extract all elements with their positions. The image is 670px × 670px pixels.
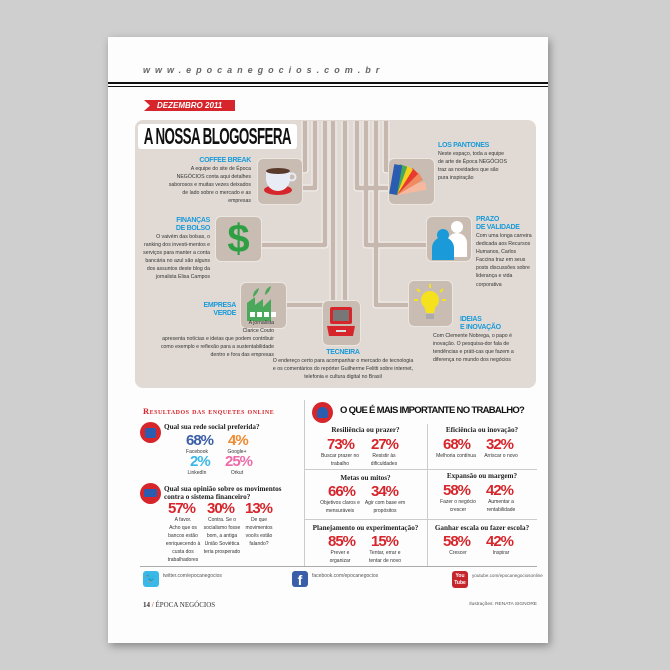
page bbox=[108, 37, 548, 643]
text: 85% bbox=[328, 533, 355, 550]
text: 🐦 bbox=[145, 573, 157, 584]
text: 13% bbox=[245, 500, 272, 517]
social: facebook bbox=[292, 571, 378, 588]
text: 58% bbox=[443, 482, 470, 499]
text: 73% bbox=[327, 436, 354, 453]
text: financas: FINANÇAS bbox=[176, 217, 210, 224]
text: Metas ou mitos? bbox=[340, 474, 391, 482]
text: los pantones: Neste espaço, toda a equipe de arte de Época NEGÓCIOS traz as novidades que são pura inspiração bbox=[438, 151, 507, 181]
text: Ilustrações: RENATA SIGNORE bbox=[469, 602, 537, 607]
text: Ganhar escala ou fazer escola? bbox=[435, 524, 529, 532]
text: 42% bbox=[486, 533, 513, 550]
grid cells bbox=[321, 426, 400, 467]
heading: resultados: Resultados das enquetes online bbox=[143, 406, 274, 416]
date ribbon: DEZEMBRO 2011 bbox=[157, 101, 222, 110]
text: apresenta notícias e ideias que podem contribuir como exemplo e reflexão para a sustentabilidade dentro e fora das empresas bbox=[161, 336, 274, 358]
social: twitter bbox=[143, 571, 222, 587]
icon: pantone bbox=[388, 158, 435, 205]
icon: thumb bbox=[140, 422, 161, 443]
text: Melhoria contínua bbox=[436, 453, 476, 459]
text: 27% bbox=[371, 436, 398, 453]
text: You bbox=[455, 573, 465, 579]
text: empresa verde: EMPRESA bbox=[203, 302, 236, 309]
text: 2% bbox=[190, 453, 210, 470]
text: Contra. Se o socialismo fosse bom, a antiga União Soviética teria prosperado bbox=[204, 517, 240, 555]
icon: coffee bbox=[257, 158, 303, 205]
text: Facebook bbox=[186, 449, 208, 455]
text: A favor. bbox=[175, 517, 191, 523]
text: Eficiência ou inovação? bbox=[446, 426, 518, 434]
social: youtube bbox=[452, 571, 543, 588]
text: 68% bbox=[443, 436, 470, 453]
icon: people bbox=[426, 216, 472, 262]
text: Tentar, errar e tentar de novo bbox=[369, 550, 401, 564]
icon: dollar: $ bbox=[227, 217, 250, 261]
text: Planejamento ou experimentação? bbox=[313, 524, 418, 532]
text: prazo de validade: PRAZO bbox=[476, 216, 499, 223]
text: Prever e organizar bbox=[330, 550, 350, 564]
poll: social bbox=[164, 423, 260, 476]
poll: movimentos: Qual sua opinião sobre os movimentos bbox=[164, 485, 281, 493]
text: f bbox=[298, 572, 302, 588]
text: Tube bbox=[454, 580, 466, 586]
icon: worker bbox=[312, 402, 333, 423]
text: A jornalista bbox=[249, 320, 274, 326]
grid cells: Resiliência ou prazer? bbox=[331, 426, 400, 434]
text: ideias e inovacao: E INOVAÇÃO bbox=[460, 324, 501, 331]
text: Acho que os bancos estão enriquecendo à custa dos trabalhadores bbox=[166, 525, 200, 563]
icon: laptop bbox=[322, 300, 361, 346]
text: empresa verde: VERDE bbox=[213, 310, 236, 317]
poll: movimentos: contra o sistema financeiro? bbox=[164, 493, 250, 501]
icon: card bbox=[140, 483, 161, 504]
text: Expansão ou margem? bbox=[447, 472, 517, 480]
text: Crescer bbox=[449, 550, 467, 556]
text: 25% bbox=[225, 453, 252, 470]
text: Objetivos claros e mensuráveis bbox=[320, 500, 360, 514]
text: tecneira: O endereço certo para acompanhar o mercado de tecnologia e os comentários do repórter Guilherme Felitti sobre internet, telefonia e cultura digital no Brasil bbox=[273, 358, 413, 380]
text: financas: DE BOLSO bbox=[176, 225, 210, 232]
icon: dollar bbox=[215, 216, 262, 262]
text: ideias e inovacao: IDEIAS bbox=[460, 316, 482, 323]
text: Clarice Couto bbox=[243, 328, 274, 334]
text: financas: O vaivém das bolsas, o ranking dos investi-mentos e serviços para manter a conta bancária no azul são alguns dos assuntos deste blog da jornalista Elisa Campos bbox=[143, 234, 210, 280]
text: facebook.com/epocanegocios bbox=[312, 573, 378, 579]
text: Aumentar a rentabilidade bbox=[487, 499, 515, 513]
text: 15% bbox=[371, 533, 398, 550]
text: De que movimentos vocês estão falando? bbox=[246, 517, 272, 547]
text: 68% bbox=[186, 432, 213, 449]
panel: blogosfera bbox=[135, 120, 536, 388]
heading: trabalho: O QUE É MAIS IMPORTANTE NO TRABALHO? bbox=[340, 405, 524, 416]
text: 58% bbox=[443, 533, 470, 550]
text: twitter.com/epocanegocios bbox=[163, 573, 222, 579]
text: 34% bbox=[371, 483, 398, 500]
icon: factory bbox=[240, 282, 287, 329]
footer: 14 / ÉPOCA NEGÓCIOS bbox=[143, 601, 215, 609]
date ribbon bbox=[144, 100, 235, 111]
text: 4% bbox=[228, 432, 248, 449]
text: 66% bbox=[328, 483, 355, 500]
text: Inspirar bbox=[493, 550, 509, 556]
text: los pantones: LOS PANTONES bbox=[438, 142, 489, 149]
poll: social: Qual sua rede social preferida? bbox=[164, 423, 260, 431]
text: 57% bbox=[168, 500, 195, 517]
text: Fazer o negócio crescer bbox=[440, 499, 476, 513]
text: 32% bbox=[486, 436, 513, 453]
text: 42% bbox=[486, 482, 513, 499]
text: tecneira: TECNEIRA bbox=[326, 349, 360, 356]
text: youtube.com/epocanegociosonline bbox=[472, 573, 543, 578]
text: Agir com base em propósitos bbox=[365, 500, 405, 514]
text: ideias e inovacao bbox=[433, 316, 514, 363]
text: coffee break: COFFEE BREAK bbox=[199, 157, 251, 164]
poll: movimentos bbox=[164, 485, 282, 563]
text: Orkut bbox=[231, 470, 243, 476]
url header: www.epocanegocios.com.br bbox=[143, 65, 384, 75]
icon: bulb bbox=[408, 280, 453, 327]
text: Buscar prazer no trabalho bbox=[321, 453, 359, 467]
text: empresa verde bbox=[203, 302, 236, 317]
text: prazo de validade: Com uma longa carreira dedicada aos Recursos Humanos, Carlos Faccina traz em seus posts discussões sobre liderança e vida corporativa bbox=[476, 233, 532, 288]
text: LinkedIn bbox=[188, 470, 206, 476]
text: coffee break: A equipe do site de Época NEGÓCIOS conta aqui detalhes saborosos e muitas vezes deixados de lado sobre o mercado e as empresas bbox=[169, 166, 251, 204]
text: Google+ bbox=[227, 449, 247, 455]
text: Resistir às dificuldades bbox=[371, 453, 397, 467]
text: 30% bbox=[207, 500, 234, 517]
text: prazo de validade: DE VALIDADE bbox=[476, 224, 520, 231]
text: ideias e inovacao: Com Clemente Nobrega, o papo é inovação. O pesquisa-dor fala de tendências e práti-cas que fazem a diferença no mundo dos negócios bbox=[433, 333, 514, 363]
text: Arriscar o novo bbox=[484, 453, 518, 459]
